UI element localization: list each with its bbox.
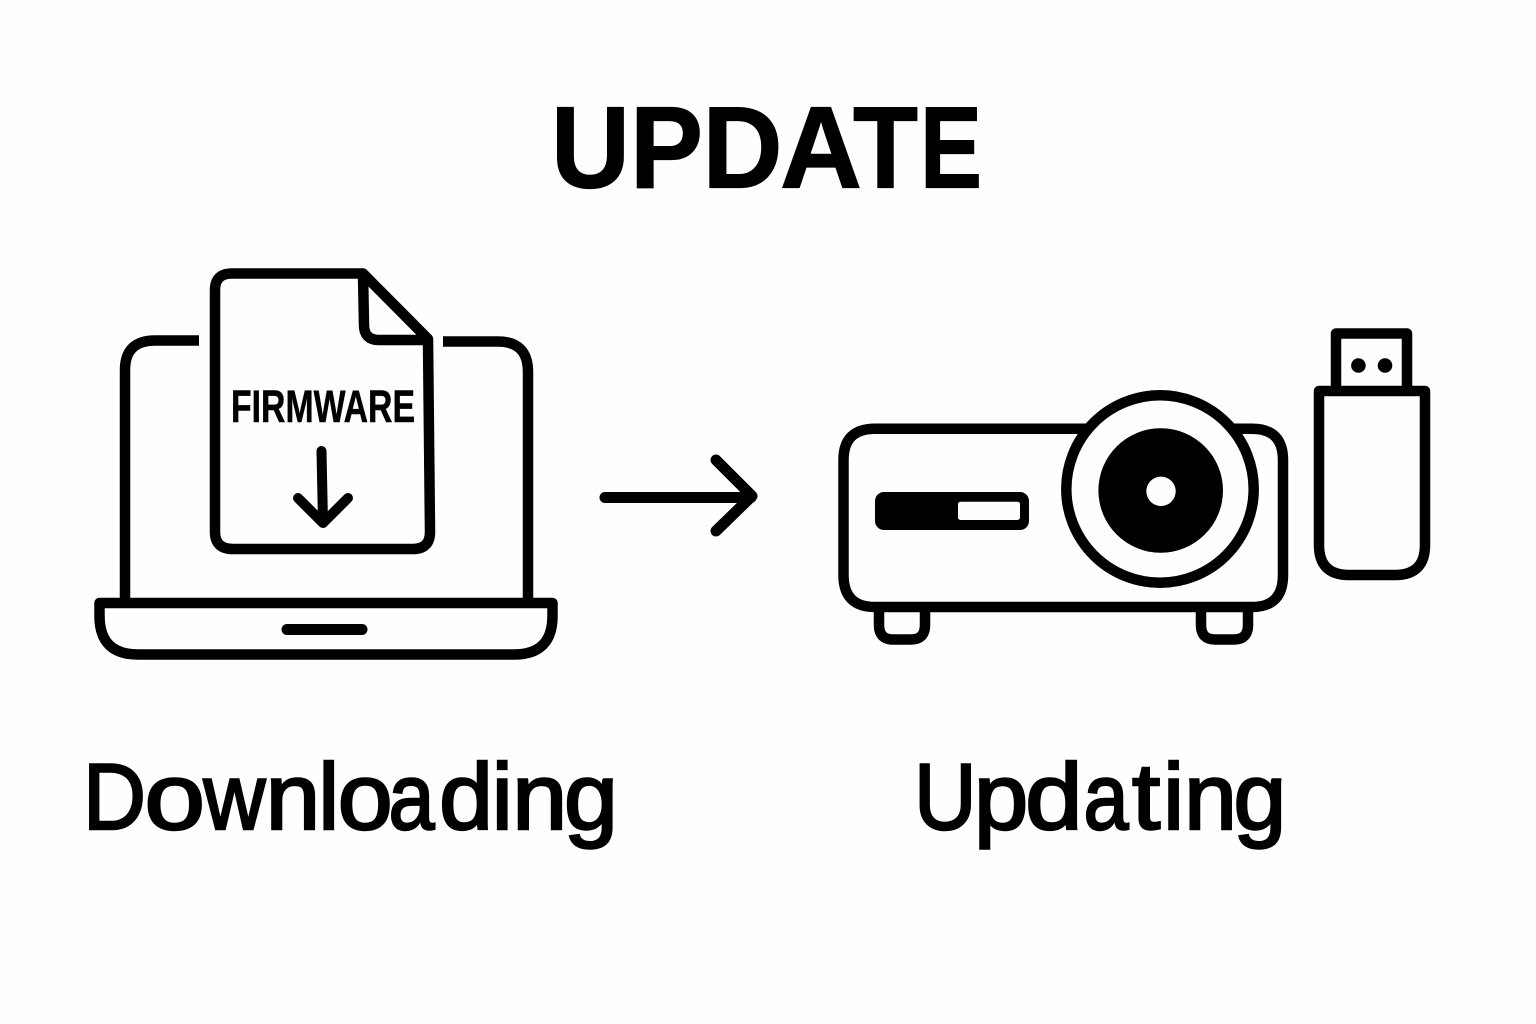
lens inner disc — [1098, 428, 1223, 553]
lens pupil — [1146, 477, 1176, 506]
label: downloading: d — [439, 744, 493, 849]
lens outer ring — [1066, 395, 1254, 583]
label: downloading: i — [492, 744, 513, 849]
laptop screen — [125, 340, 528, 600]
label: downloading: w — [203, 744, 266, 849]
label: updating: n — [1184, 744, 1237, 849]
title: P — [630, 82, 703, 212]
title: D — [702, 82, 782, 212]
firmware label: FIRMWARE — [231, 381, 415, 432]
icon: projector — [844, 395, 1283, 640]
usb connector holes — [1351, 358, 1392, 373]
label: updating: U — [914, 744, 977, 849]
label: updating: d — [1025, 744, 1083, 849]
label: updating: i — [1163, 744, 1184, 849]
label: updating: a — [1084, 744, 1129, 849]
download arrow — [298, 451, 348, 523]
projector body — [844, 429, 1283, 607]
title: U — [551, 82, 630, 212]
projector feet — [879, 607, 1248, 640]
label: downloading: l — [318, 744, 339, 849]
label: downloading: o — [338, 744, 393, 849]
label: downloading: D — [83, 744, 146, 849]
usb connector — [1336, 334, 1407, 394]
icon: laptop with firmware file — [100, 274, 552, 654]
label: updating: t — [1132, 744, 1160, 849]
label: downloading: g — [564, 744, 618, 849]
document folded corner — [363, 274, 428, 340]
label: downloading: a — [388, 744, 435, 849]
arrow — [605, 460, 752, 531]
progress bar — [875, 492, 1029, 530]
label: downloading: n — [512, 744, 567, 849]
title: E — [920, 82, 982, 212]
firmware document — [215, 274, 430, 549]
laptop trackpad notch — [287, 624, 362, 635]
title: T — [853, 82, 918, 212]
label: downloading: o — [144, 744, 205, 849]
usb body — [1319, 391, 1425, 575]
label: downloading: n — [266, 744, 320, 849]
laptop base — [100, 603, 552, 654]
label: updating: p — [974, 744, 1028, 849]
title: A — [780, 82, 862, 212]
icon: usb drive — [1319, 334, 1425, 575]
label: updating: g — [1234, 744, 1286, 849]
